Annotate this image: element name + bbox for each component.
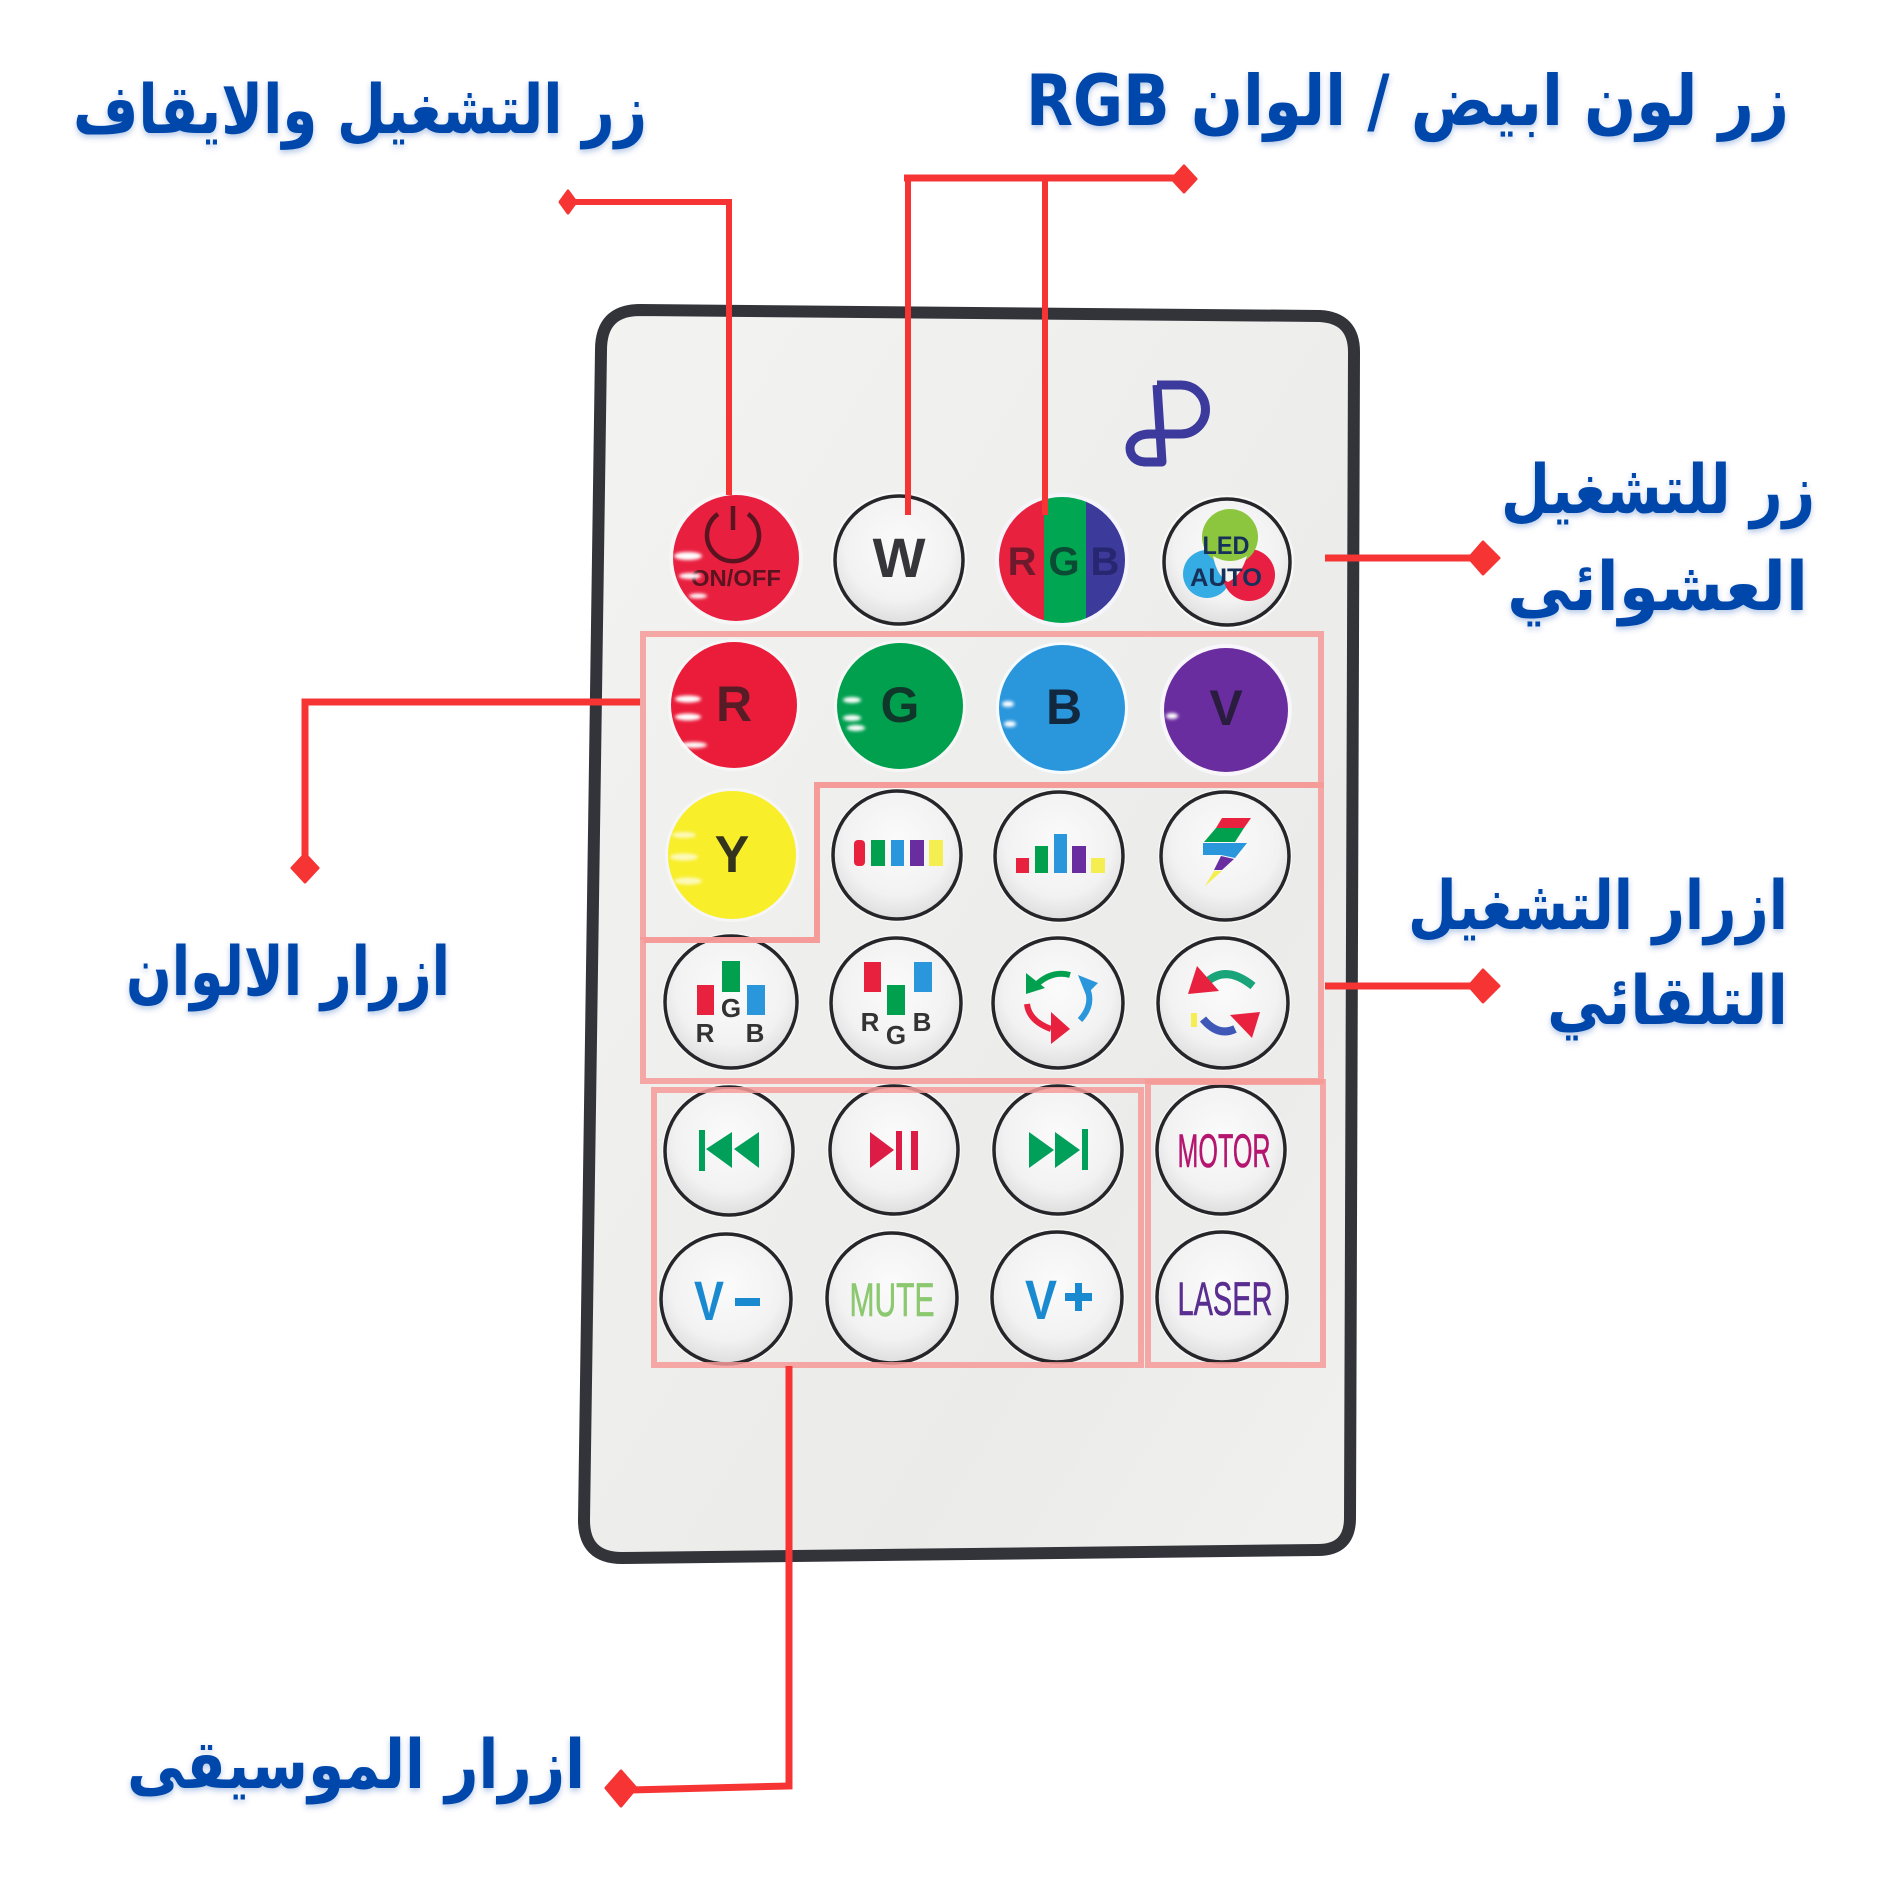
button: lightning bbox=[1158, 789, 1292, 923]
brand logo bbox=[1130, 385, 1205, 462]
button: MUTE bbox=[824, 1230, 960, 1366]
button: W: W bbox=[873, 526, 926, 589]
highlight box: auto-play buttons bbox=[643, 785, 1321, 1081]
button: next bbox=[991, 1083, 1125, 1217]
arrow: music buttons bbox=[606, 1366, 789, 1806]
button: V minus: V bbox=[694, 1269, 724, 1332]
button: B bbox=[996, 642, 1128, 774]
arrow: auto play buttons bbox=[1325, 970, 1499, 1002]
button: previous bbox=[662, 1084, 796, 1218]
button: RGB: B bbox=[1091, 540, 1119, 584]
button: MOTOR: MOTOR bbox=[1178, 1124, 1270, 1177]
button: ON/OFF bbox=[669, 491, 803, 625]
button: three-arrow cycle bbox=[990, 935, 1126, 1071]
arrow: white and RGB buttons bbox=[904, 166, 1196, 515]
highlight box: music buttons bbox=[654, 1090, 1141, 1365]
arrow: colour buttons bbox=[292, 702, 640, 882]
button: LED AUTO bbox=[1160, 495, 1294, 629]
button: LASER: LASER bbox=[1178, 1272, 1272, 1325]
highlight box: colour buttons bbox=[643, 634, 1321, 940]
title: white and RGB button: زر لون ابيض / الوان RGB bbox=[1026, 60, 1789, 143]
button: RGB bbox=[995, 493, 1129, 627]
button: ON/OFF: ON/OFF bbox=[691, 565, 781, 591]
button: R: R bbox=[716, 676, 752, 732]
button: LED AUTO: LED bbox=[1202, 532, 1250, 560]
button: RGB: G bbox=[1048, 540, 1080, 584]
remote control body bbox=[584, 310, 1354, 1558]
button: equalizer bars bbox=[992, 789, 1126, 923]
highlight box: motor and laser bbox=[1148, 1082, 1323, 1365]
title: power button: زر التشغيل والايقاف bbox=[73, 71, 647, 150]
button: two-arrow swap bbox=[1155, 935, 1291, 1071]
button: V minus bbox=[658, 1231, 794, 1367]
button: V plus: V bbox=[1025, 1268, 1057, 1331]
button: RGB bars 2 bbox=[828, 935, 964, 1071]
label: random play button line 2: العشوائي bbox=[1507, 548, 1808, 627]
button: V bbox=[1160, 644, 1292, 776]
button: MUTE: MUTE bbox=[850, 1273, 934, 1326]
button: LASER bbox=[1154, 1229, 1290, 1365]
button: RGB bars 1: G bbox=[721, 993, 741, 1023]
button: MOTOR bbox=[1154, 1083, 1288, 1217]
button: RGB bars 2: B bbox=[913, 1007, 931, 1037]
button: Y: Y bbox=[715, 826, 749, 884]
button: Y bbox=[665, 788, 799, 922]
button: RGB bars 1: R bbox=[696, 1018, 715, 1048]
button: LED AUTO: AUTO bbox=[1190, 564, 1262, 592]
button: W bbox=[831, 492, 967, 628]
button: G bbox=[834, 640, 966, 772]
button: B: B bbox=[1046, 679, 1082, 735]
button: RGB bars 1 bbox=[662, 933, 800, 1071]
label: auto play buttons line 1: ازرار التشغيل bbox=[1408, 867, 1788, 946]
button: R bbox=[668, 639, 800, 771]
button: V plus bbox=[989, 1229, 1125, 1365]
button: RGB: R bbox=[1008, 540, 1037, 584]
button: RGB bars 2: G bbox=[886, 1020, 906, 1050]
button: RGB bars 1: B bbox=[746, 1018, 764, 1048]
arrow: random play button bbox=[1325, 542, 1499, 574]
button: horizontal colour bars bbox=[830, 788, 964, 922]
label: music buttons: ازرار الموسيقى bbox=[127, 1726, 585, 1805]
button: V: V bbox=[1209, 680, 1243, 736]
button: RGB bars 2: R bbox=[861, 1007, 880, 1037]
label: auto play buttons line 2: التلقائي bbox=[1547, 962, 1788, 1041]
button: play/pause bbox=[827, 1083, 961, 1217]
label: random play button line 1: زر للتشغيل bbox=[1501, 451, 1815, 530]
button: G: G bbox=[881, 677, 919, 733]
arrow: power button bbox=[560, 191, 729, 495]
label: colour buttons: ازرار الالوان bbox=[126, 933, 450, 1012]
